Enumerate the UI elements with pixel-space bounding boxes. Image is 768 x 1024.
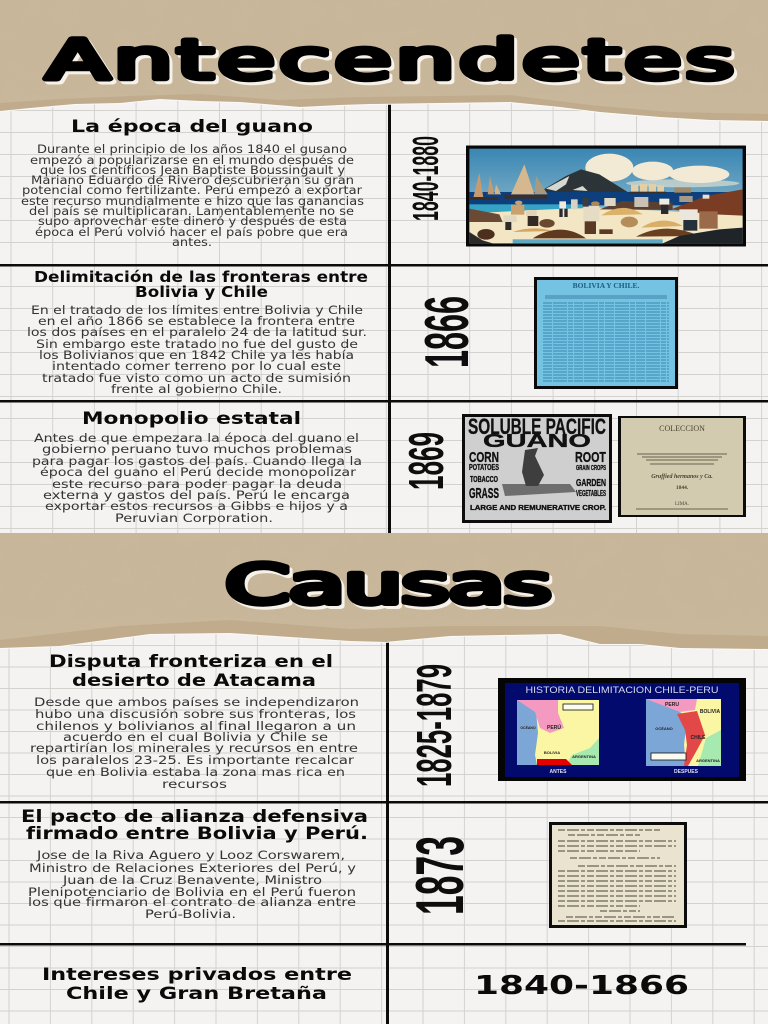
text block: disputa	[30, 695, 359, 791]
text block: guano: Mariano Eduardo de Rivero descubrieran su gran	[31, 173, 354, 187]
text block: monopolio: para pagar los gastos del país. Cuando llega la	[32, 454, 362, 468]
image: Soluble Pacific Guano poster: SOLUBLE PACIFIC	[468, 414, 606, 439]
image: Soluble Pacific Guano poster: VEGETABLES	[576, 489, 606, 498]
text block: tratado: Sin embargo este tratado no fue del gusto de	[36, 337, 358, 351]
text block: tratado: los dos países en el paralelo 24 de la latitud sur.	[27, 325, 367, 339]
image: Colección book cover: COLECCION	[659, 424, 705, 433]
image: Soluble Pacific Guano poster: GARDEN	[576, 478, 606, 489]
image: map Historia delimitación Chile-Perú: ARGENTINA	[696, 758, 720, 763]
heading: El pacto de alianza defensiva firmado entre Bolivia y Perú: firmado entre Bolivia y Perú.	[26, 824, 368, 843]
text block: pacto: Ministro de Relaciones Exteriores del Perú, y	[29, 861, 356, 875]
year label: 1866: 1866	[413, 296, 482, 368]
text block: guano: que los científicos Jean Baptiste Boussingault y	[40, 163, 345, 177]
year label: 1873: 1873	[402, 836, 478, 915]
text block: monopolio: este recurso para poder pagar la deuda	[52, 477, 342, 491]
image: Soluble Pacific Guano poster	[462, 414, 612, 523]
text block: tratado: intentado comer terreno por lo cual este	[52, 359, 341, 373]
title: Antecendetes: Antecendetes	[49, 31, 737, 94]
divider lines: upper timeline table	[0, 104, 768, 533]
panel: Disputa fronteriza	[30, 652, 359, 791]
image: Soluble Pacific Guano poster: TOBACCO	[470, 475, 498, 484]
text block: monopolio: gobierno peruano tuvo muchos problemas	[42, 442, 352, 456]
text block: guano	[21, 142, 364, 249]
text block: monopolio: exportar estos recursos a Gibbs e hijos y a	[45, 499, 348, 513]
image: Soluble Pacific Guano poster: GRAIN CROPS	[576, 465, 606, 472]
text block: monopolio: Peruvian Corporation.	[115, 511, 273, 525]
banner: torn kraft paper top	[0, 0, 768, 122]
year label: 1825-1879: 1825-1879	[408, 664, 462, 787]
title: Causas: Causas	[225, 553, 552, 616]
panel: Monopolio estatal	[32, 409, 362, 525]
text block: disputa: Desde que ambos países se independizaron	[34, 695, 359, 709]
text block: monopolio: época del guano el Perú decide monopolizar	[40, 465, 356, 479]
text block: guano: Durante el principio de los años 1840 el gusano	[37, 142, 347, 156]
divider lines: lower timeline table	[0, 640, 768, 1024]
image: map Historia delimitación Chile-Perú: ANTES	[550, 769, 567, 775]
image: map Historia delimitación Chile-Perú: OCÉANO	[655, 726, 673, 731]
heading: Disputa fronteriza en el desierto de Atacama: Disputa fronteriza en el	[49, 652, 333, 672]
heading: Disputa fronteriza en el desierto de Atacama: desierto de Atacama	[72, 671, 316, 691]
text block: tratado: En el tratado de los límites entre Bolivia y Chile	[31, 303, 363, 317]
heading: Intereses privados entre Chile y Gran Bretaña: Intereses privados entre	[42, 965, 352, 985]
text block: pacto: Perú-Bolivia.	[145, 907, 236, 921]
text block: monopolio: externa y gastos del país. Perú le encarga	[43, 488, 350, 502]
heading: Intereses privados entre Chile y Gran Bretaña	[42, 965, 352, 1004]
text block: pacto: Plenipotenciario de Bolivia en el Perú fueron	[28, 885, 356, 899]
image: Colección book cover: Gruffied hermanos y Ca.	[651, 474, 713, 480]
image: guano workers on the coast	[466, 146, 746, 246]
text block: disputa: repartirían los minerales y recursos en entre	[30, 741, 358, 755]
title: Causas: Causas	[228, 556, 555, 619]
text block: tratado: los Bolivianos que en 1842 Chile ya les había	[39, 348, 354, 362]
text block: disputa: recursos	[162, 777, 227, 791]
text block: guano: este recurso mundialmente e hizo que las ganancias	[21, 194, 364, 208]
text block: guano: potencial como fertilizante. Perú empezó a exportar	[22, 183, 362, 197]
image: Colección book cover	[618, 416, 746, 517]
text block: tratado: tratado fue visto como un acto de sumisión	[42, 371, 351, 385]
text block: disputa: que en Bolivia estaba la zona mas rica en	[46, 765, 345, 779]
text block: tratado	[27, 303, 367, 396]
image: Soluble Pacific Guano poster: GUANO	[483, 431, 591, 451]
text block: tratado: frente al gobierno Chile.	[111, 382, 282, 396]
text block: disputa: los paralelos 23-25. Es importante recalcar	[36, 753, 354, 767]
text block: pacto: los que firmaron el contrato de alianza entre	[28, 895, 356, 909]
text block: monopolio	[32, 431, 362, 525]
image: map Historia delimitación Chile-Perú: PERU	[665, 702, 679, 708]
panel: La época del guano	[21, 117, 364, 249]
image: map Historia delimitación Chile-Perú: OCÉANO	[520, 725, 536, 730]
heading: Delimitación de las fronteras entre Bolivia y Chile: Bolivia y Chile	[135, 283, 268, 301]
image: Soluble Pacific Guano poster: LARGE AND REMUNERATIVE CROP.	[470, 503, 606, 512]
image: map Historia delimitación Chile-Perú: CHILE	[690, 735, 706, 741]
heading: El pacto de alianza defensiva firmado entre Bolivia y Perú: El pacto de alianza defensiva	[21, 807, 368, 826]
workers	[503, 195, 718, 234]
panel: El pacto de alianza defensiva	[21, 807, 368, 921]
text: 1840-1880	[405, 136, 446, 221]
heading: Intereses privados entre Chile y Gran Bretaña: Chile y Gran Bretaña	[66, 984, 327, 1004]
panel: Intereses privados	[42, 965, 689, 1004]
text block: disputa: hubo una discusión sobre sus fronteras, los	[35, 707, 356, 721]
text block: guano: del país se multiplicaran. Lamentablemente no se	[29, 204, 354, 218]
heading: Delimitación de las fronteras entre Bolivia y Chile: Delimitación de las fronteras entre	[34, 268, 368, 286]
text block: disputa: chilenos y bolivianos al final llegaron a un	[36, 719, 356, 733]
image: Soluble Pacific Guano poster: GRASS	[469, 485, 499, 502]
title: Antecendetes: Antecendetes	[46, 28, 734, 91]
image: map Historia delimitación Chile-Perú: PERÚ	[547, 724, 561, 731]
image: Colección book cover: 1844.	[676, 485, 689, 491]
image: newspaper Bolivia y Chile	[534, 277, 678, 389]
text block: disputa: acuerdo en el cual Bolivia y Chile se	[63, 730, 328, 744]
year label: 1869: 1869	[400, 432, 454, 490]
image: Soluble Pacific Guano poster: ROOT	[575, 449, 606, 466]
text block: pacto: Juan de la Cruz Benavente, Ministro	[62, 873, 322, 887]
image: Soluble Pacific Guano poster: CORN	[469, 449, 499, 466]
text block: pacto: Jose de la Riva Aguero y Looz Corswarem,	[36, 848, 345, 862]
image: map Historia delimitación Chile-Perú: BOLIVIA	[544, 750, 560, 755]
text block: pacto	[28, 848, 356, 921]
text block: guano: época el Perú volvió hacer el país pobre que era	[35, 225, 348, 239]
heading: El pacto de alianza defensiva firmado entre Bolivia y Perú	[21, 807, 368, 843]
image: map Historia delimitación Chile-Perú: DESPUES	[674, 769, 699, 775]
heading: Monopolio estatal: Monopolio estatal	[82, 409, 301, 429]
text block: guano: supo aprovechar este dineró y después de esta	[38, 214, 347, 228]
banner: torn kraft paper middle	[0, 533, 768, 650]
panel: Delimitación de las fronteras	[27, 268, 368, 396]
image: newspaper Bolivia y Chile: BOLIVIA Y CHILE.	[573, 281, 639, 290]
text block: tratado: en el año 1866 se establece la frontera entre	[38, 314, 355, 328]
image: map Historia delimitación Chile-Perú: HISTORIA DELIMITACION CHILE-PERU	[526, 685, 718, 695]
text block: guano: empezó a popularizarse en el mundo después de	[30, 153, 354, 167]
heading: Delimitación de las fronteras entre Bolivia y Chile	[34, 268, 368, 301]
image: Colección book cover: LIMA.	[675, 502, 689, 507]
image: map Historia delimitación Chile-Perú: BOLIVIA	[700, 709, 721, 715]
image: handwritten treaty document	[549, 822, 687, 928]
image: map Historia delimitación Chile-Perú: ARGENTINA	[572, 754, 596, 759]
image: map Historia delimitación Chile-Perú	[498, 678, 746, 781]
text block: monopolio: Antes de que empezara la época del guano el	[34, 431, 359, 445]
heading: Disputa fronteriza en el desierto de Atacama	[49, 652, 333, 691]
text block: guano: antes.	[172, 235, 212, 249]
image: Soluble Pacific Guano poster: POTATOES	[469, 463, 499, 472]
year label: 1840-1866: 1840-1866	[474, 971, 689, 1001]
heading: La época del guano: La época del guano	[71, 117, 313, 137]
